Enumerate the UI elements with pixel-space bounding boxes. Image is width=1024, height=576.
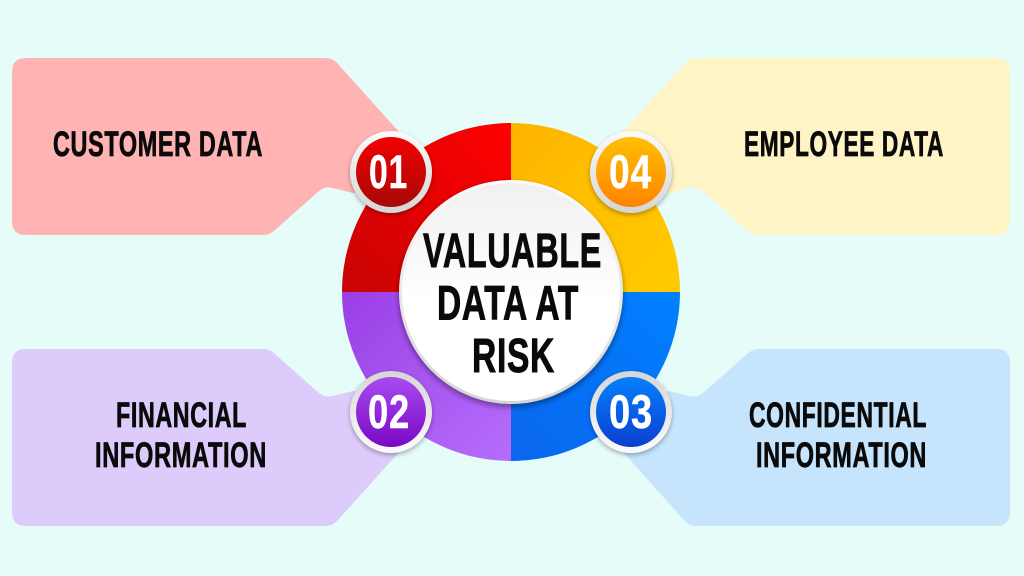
panel: financial information	[12, 349, 400, 526]
badge 04: 04	[609, 145, 652, 198]
center title	[423, 225, 602, 383]
label: financial information	[95, 395, 267, 475]
badge 02	[350, 371, 432, 455]
badge 02: 02	[368, 385, 410, 438]
badge 03: 03	[609, 385, 653, 438]
label: customer data: CUSTOMER DATA	[53, 124, 263, 164]
panel: confidential information	[622, 349, 1010, 526]
label: financial information: FINANCIAL	[116, 395, 247, 435]
label: financial information: INFORMATION	[95, 435, 267, 475]
ring chart	[342, 123, 680, 461]
label: confidential information	[749, 395, 927, 475]
center title: VALUABLE	[423, 225, 602, 278]
label: confidential information: INFORMATION	[756, 435, 927, 475]
badge 04	[590, 131, 672, 215]
badge 01	[350, 131, 432, 215]
badge 01: 01	[369, 145, 408, 198]
center title: DATA AT	[437, 278, 579, 330]
panel: customer data	[12, 58, 400, 235]
panel: employee data	[622, 58, 1010, 235]
label: confidential information: CONFIDENTIAL	[749, 395, 927, 435]
center title: RISK	[472, 330, 555, 383]
center circle	[398, 180, 624, 408]
badge 03	[590, 371, 672, 455]
